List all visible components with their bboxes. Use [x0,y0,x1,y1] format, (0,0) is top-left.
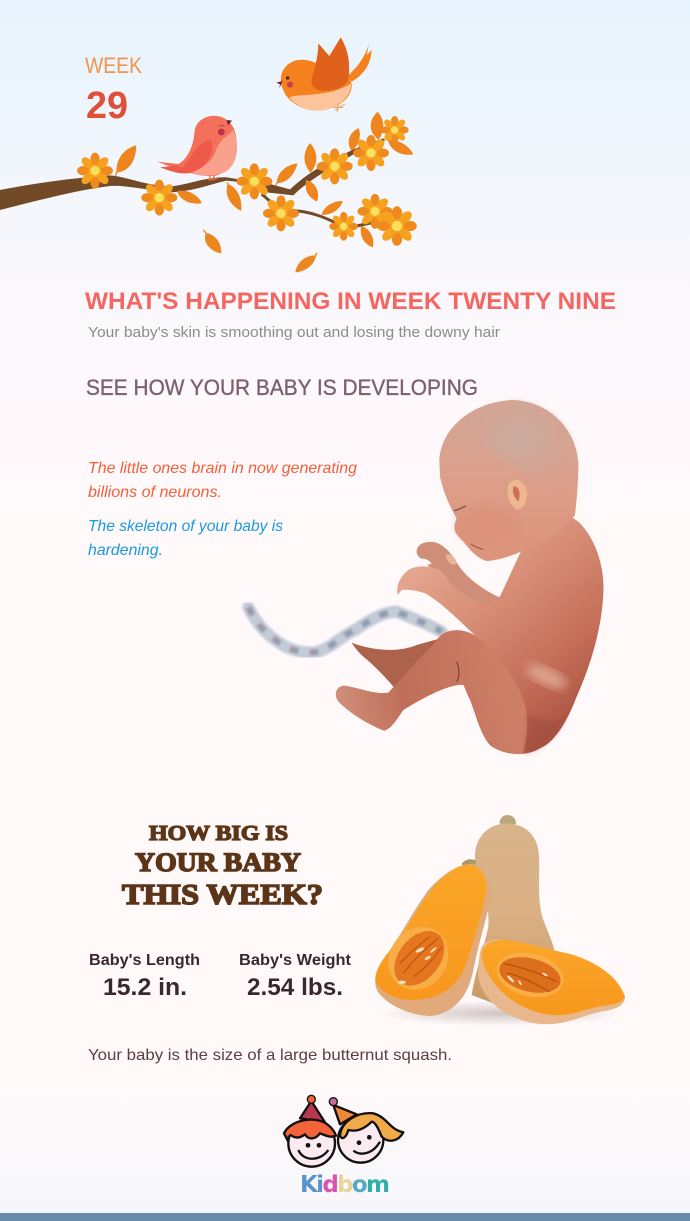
section heading: SEE HOW YOUR BABY IS DEVELOPING [86,375,478,400]
sub heading: Your baby's skin is smoothing out and losing the downy hair [88,324,500,341]
skeleton fact: The skeleton of your baby is [88,518,283,535]
far arm and hand [417,542,502,607]
illustration: birds on flowering branch [0,37,417,272]
near arm and hand [397,566,550,645]
logo faces [284,1095,403,1167]
body contour shade [523,713,567,754]
week word: WEEK [85,53,142,78]
ground shadow [377,1001,623,1026]
week label [85,53,142,127]
fibres and seeds [400,937,442,977]
brain fact: billions of neurons. [88,484,222,501]
cheek shading [457,505,517,542]
far leg and foot [352,637,460,687]
stat: weight: 2.54 lbs. [247,974,343,1001]
whole squash [472,815,555,1003]
flowers [77,116,417,246]
boy face [288,1120,335,1167]
scalp hair shading [447,401,578,512]
right squash half [478,939,625,1024]
knee crease [457,662,459,682]
stat: weight [239,952,352,1001]
gap between hands [415,558,432,565]
footer bar [0,1213,690,1221]
skeleton fact [88,518,283,559]
boy hair [284,1120,336,1142]
logo wordmark: Kidbom [300,1172,390,1198]
brain fact: The little ones brain in now generating [88,460,357,477]
boy hat pompom [307,1095,315,1103]
torso [461,516,603,754]
hip highlight [523,660,570,694]
finger detail [446,554,457,565]
illustration: fetus at 29 weeks [248,400,603,754]
brain fact [88,460,357,501]
skeleton fact: hardening. [88,542,163,559]
leaves [116,113,412,272]
size heading: HOW BIG IS [149,821,288,845]
left squash half [375,859,491,1016]
head [439,400,578,561]
stat: length: 15.2 in. [103,974,187,1001]
boy hat [300,1101,325,1122]
near leg and foot [336,630,527,754]
perched coral bird [157,116,237,181]
girl hat [333,1105,357,1124]
week number: 29 [86,85,128,127]
ear [507,480,527,509]
main heading: WHAT'S HAPPENING IN WEEK TWENTY NINE [85,288,616,315]
size comparison caption: Your baby is the size of a large butternut squash. [88,1047,452,1064]
mouth [471,544,483,549]
umbilical cord [248,607,442,653]
girl hat pompom [329,1098,337,1106]
illustration: butternut squash [375,815,625,1026]
stat: weight: Baby's Weight [239,952,352,969]
fibres and seeds [503,963,557,992]
eyes and smiles [298,1135,380,1159]
stat: length [89,952,200,1001]
size heading [122,821,323,911]
size heading: THIS WEEK? [122,879,323,911]
branch [0,138,385,226]
girl hair [340,1113,403,1141]
logo [284,1095,403,1198]
size heading: YOUR BABY [135,848,301,877]
closed eye [454,506,466,511]
flying orange bird [276,37,372,112]
girl face [338,1117,383,1163]
stat: length: Baby's Length [89,952,200,969]
